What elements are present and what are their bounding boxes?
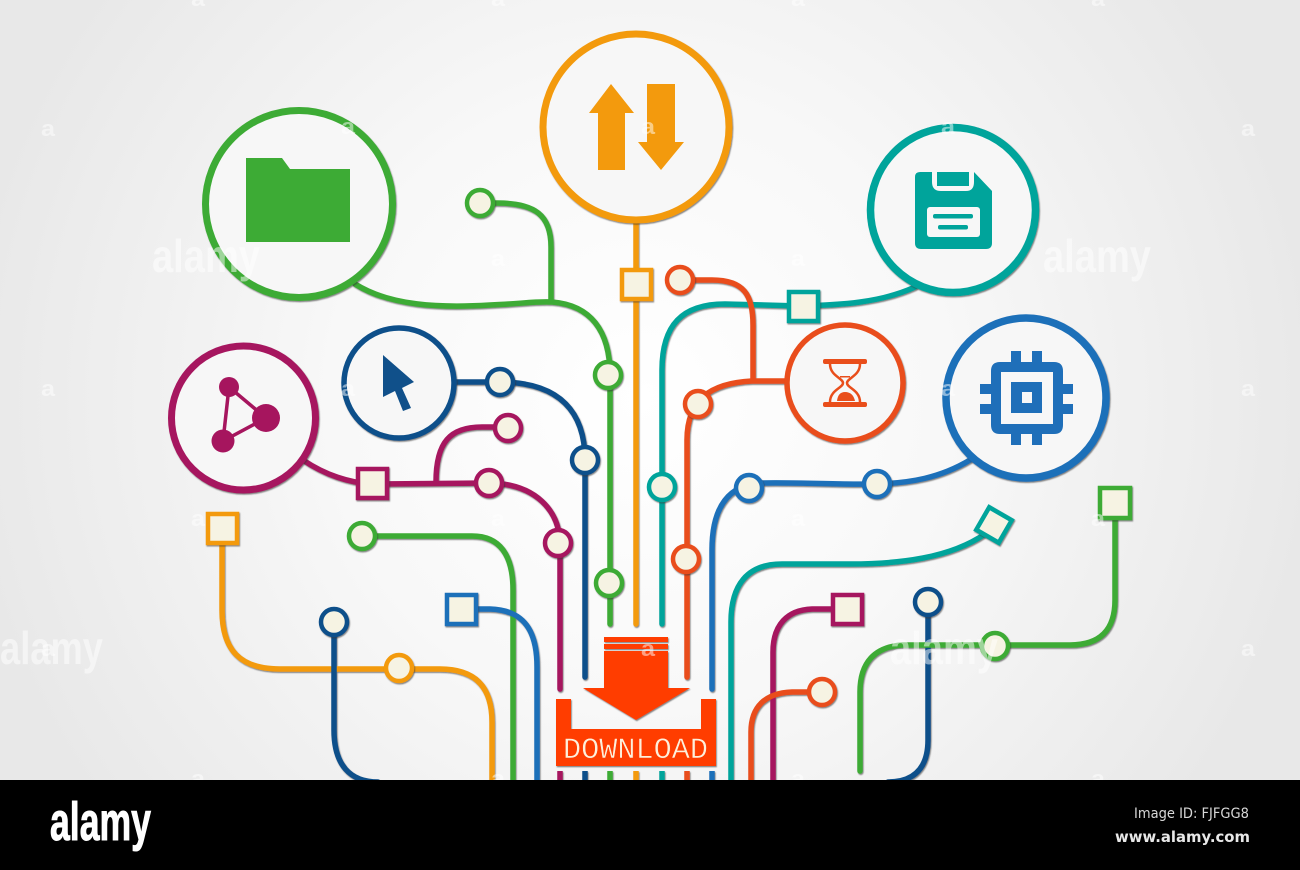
image id: Image ID: FJFGG8 [1134, 806, 1249, 822]
watermarks: alamy [890, 622, 998, 674]
line: blue left [462, 609, 537, 785]
line: orange from arrows [633, 222, 639, 624]
icon: hourglass [823, 359, 867, 407]
watermarks: alamy [0, 622, 103, 674]
icon: chip [980, 351, 1073, 445]
line: navy left [334, 622, 378, 782]
watermarks: a [41, 116, 56, 141]
icon: cursor [383, 355, 414, 411]
circle: up down arrows [543, 34, 729, 220]
watermarks: a [1241, 636, 1256, 661]
footer band [0, 780, 1300, 870]
line: blue from chip [712, 460, 970, 689]
watermarks: a [41, 376, 56, 401]
watermarks: a [491, 246, 506, 271]
watermarks: a [941, 376, 956, 401]
line: navy right [888, 602, 928, 782]
watermarks: a [491, 766, 506, 791]
arrow [583, 637, 690, 720]
circle: network [172, 346, 316, 490]
watermarks: a [641, 636, 656, 661]
download icon [556, 637, 716, 768]
circle: chip [946, 318, 1106, 478]
connecting lines [222, 203, 1115, 785]
icon: transfer arrows [589, 84, 684, 170]
icon: network [212, 377, 280, 452]
watermarks: a [491, 506, 506, 531]
watermarks: a [41, 636, 56, 661]
circle: hourglass [787, 325, 903, 441]
icon: floppy disk [915, 172, 992, 249]
watermarks: a [791, 246, 806, 271]
line: green branch [480, 203, 551, 300]
watermarks: a [191, 506, 206, 531]
watermarks: a [1241, 116, 1256, 141]
watermarks: a [1091, 766, 1106, 791]
website: www.alamy.com [1115, 828, 1250, 846]
icon: folder [246, 158, 350, 242]
watermarks: a [791, 506, 806, 531]
line: magenta right [773, 609, 848, 785]
line: teal right [731, 534, 985, 785]
line: orange left [222, 528, 492, 785]
line: green left [362, 536, 513, 785]
watermarks: a [1241, 376, 1256, 401]
watermarks: a [1091, 506, 1106, 531]
tray [556, 699, 716, 766]
watermarks: a [191, 766, 206, 791]
watermarks: alamy [152, 230, 260, 282]
watermarks: a [641, 376, 656, 401]
watermarks: a [641, 114, 656, 139]
line: magenta branch [436, 427, 508, 482]
watermarks: a [341, 114, 356, 139]
stubs below download box [560, 771, 712, 785]
circle: floppy disk [870, 128, 1036, 292]
label: download: DOWNLOAD [563, 734, 708, 768]
line: magenta from network [303, 460, 560, 689]
footer logo: alamy [50, 792, 151, 852]
watermarks: alamy [1043, 230, 1151, 282]
watermarks: a [341, 376, 356, 401]
line: navy from cursor [455, 382, 585, 677]
circle: folder [206, 110, 392, 298]
line: red from hourglass [687, 381, 785, 677]
watermarks: a [791, 766, 806, 791]
line: red right [751, 692, 822, 785]
line: teal from floppy [662, 287, 915, 624]
line: green right [860, 503, 1115, 771]
line: green from folder [355, 284, 610, 624]
connector nodes [208, 190, 1130, 705]
circle: cursor [344, 328, 454, 438]
watermarks: a [941, 114, 956, 139]
line: red branch [680, 280, 753, 380]
